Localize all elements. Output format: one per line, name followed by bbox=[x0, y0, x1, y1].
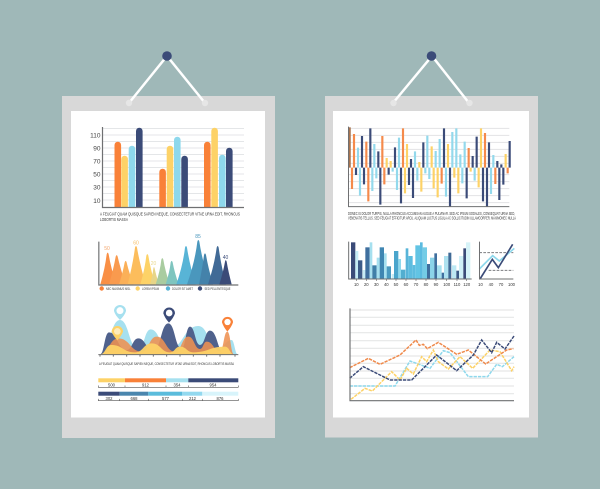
icon: orange pin bbox=[222, 317, 233, 332]
mountain chart: 60 bbox=[133, 240, 139, 246]
stacked bar 1: 500 bbox=[108, 382, 116, 388]
bar chart: positive and negative bars bbox=[348, 127, 510, 207]
line chart: small trend: 10 bbox=[478, 282, 483, 287]
text block: area chart caption: A FEUGIAT QUAM QUISQUE SAPIEN NEQUE, CONSECTETUR VITAE URNA EDIT, RHONCUS LOBORTIS MASSA bbox=[99, 362, 234, 366]
stacked bar 2 bbox=[98, 392, 238, 401]
stacked bar 2: 302 bbox=[106, 396, 113, 401]
line chart: four dashed series bbox=[350, 308, 514, 401]
bar chart: blue gradient columns: 40 bbox=[384, 282, 389, 287]
panel: right hanging board bbox=[325, 51, 538, 437]
legend: mountain chart: LOREM IPSUM bbox=[142, 287, 159, 291]
bar chart: blue gradient columns: 70 bbox=[414, 282, 419, 287]
mountain chart: 50 bbox=[104, 246, 110, 252]
bar chart: rounded vertical bars: 30 bbox=[93, 184, 101, 192]
bar chart: blue gradient columns: 90 bbox=[434, 282, 439, 287]
area: light blue layer bbox=[100, 320, 238, 354]
bar chart: blue gradient columns: 60 bbox=[404, 282, 409, 287]
bar chart: rounded vertical bars: 70 bbox=[93, 158, 101, 166]
stacked bar 1: 954 bbox=[210, 382, 217, 388]
bar chart: blue gradient columns: 110 bbox=[454, 282, 461, 287]
bar chart: blue gradient columns: 10 bbox=[354, 282, 359, 287]
series: navy bbox=[350, 336, 514, 380]
stacked bar 1: 912 bbox=[142, 382, 150, 388]
bar chart: rounded vertical bars: 10 bbox=[93, 198, 101, 205]
series: yellow bbox=[351, 350, 514, 399]
bar chart: blue gradient columns: 80 bbox=[424, 282, 429, 287]
stacked bar 1 bbox=[98, 378, 238, 388]
stacked bar 2: 212 bbox=[189, 396, 197, 401]
icon: navy pin bbox=[163, 307, 175, 323]
bar chart: blue gradient columns: 50 bbox=[394, 282, 399, 287]
legend: mountain chart: NEC MAXIMUS NISL bbox=[106, 287, 130, 291]
bar chart: rounded vertical bars bbox=[90, 127, 244, 208]
bar chart: blue gradient columns: 20 bbox=[364, 282, 369, 287]
line chart: small trend: 40 bbox=[489, 282, 494, 287]
text block: bar chart caption bbox=[100, 212, 240, 222]
line chart: small trend: 70 bbox=[499, 282, 504, 287]
area chart with map pins bbox=[98, 305, 238, 357]
stacked bar 2: 876 bbox=[216, 396, 224, 401]
stacked bar 1: 354 bbox=[174, 382, 181, 388]
icon: right hanging strings and pin bbox=[390, 51, 473, 106]
mountain chart bbox=[99, 234, 238, 285]
series: light blue bbox=[350, 351, 514, 386]
legend: mountain chart: SED PELLENTESQUE bbox=[204, 287, 231, 291]
text block: bipolar chart caption bbox=[348, 211, 516, 220]
line chart: small trend: 100 bbox=[508, 282, 516, 287]
bar chart: rounded vertical bars: 90 bbox=[93, 146, 101, 152]
area: yellow layer bbox=[100, 343, 234, 354]
stacked bar 2: 668 bbox=[130, 396, 138, 401]
text block: bar chart caption: A FEUGIAT QUAM QUISQUE SAPIEN NEQUE, CONSECTETUR VITAE URNA EDIT, RHONCUS bbox=[100, 212, 240, 216]
bar chart: rounded vertical bars: 50 bbox=[93, 172, 101, 178]
stacked bar 2: 577 bbox=[162, 396, 170, 401]
icon: left hanging strings and pin bbox=[126, 51, 208, 106]
icon: yellow pin bbox=[112, 326, 123, 340]
mountain chart: 20 bbox=[151, 261, 156, 267]
mountain chart: 40 bbox=[223, 255, 228, 261]
mountain chart: 85 bbox=[195, 234, 201, 240]
panel: left hanging board bbox=[62, 51, 275, 438]
legend: mountain chart bbox=[100, 286, 231, 291]
bar chart: blue gradient columns: 120 bbox=[463, 282, 471, 287]
bar chart: blue gradient columns bbox=[349, 242, 472, 287]
line chart: small trend bbox=[478, 242, 516, 287]
bar chart: blue gradient columns: 30 bbox=[374, 282, 379, 287]
area: orange layer bbox=[100, 332, 234, 354]
bar chart: rounded vertical bars: 110 bbox=[90, 132, 101, 140]
area: navy layer bbox=[100, 323, 225, 354]
icon: light blue pin bbox=[114, 305, 126, 320]
text block: bar chart caption: LOBORTIS MASSA bbox=[100, 217, 128, 222]
legend: mountain chart: DOLOR SIT AMET bbox=[172, 287, 193, 291]
bar chart: blue gradient columns: 100 bbox=[443, 282, 451, 287]
series: orange bbox=[350, 340, 513, 368]
